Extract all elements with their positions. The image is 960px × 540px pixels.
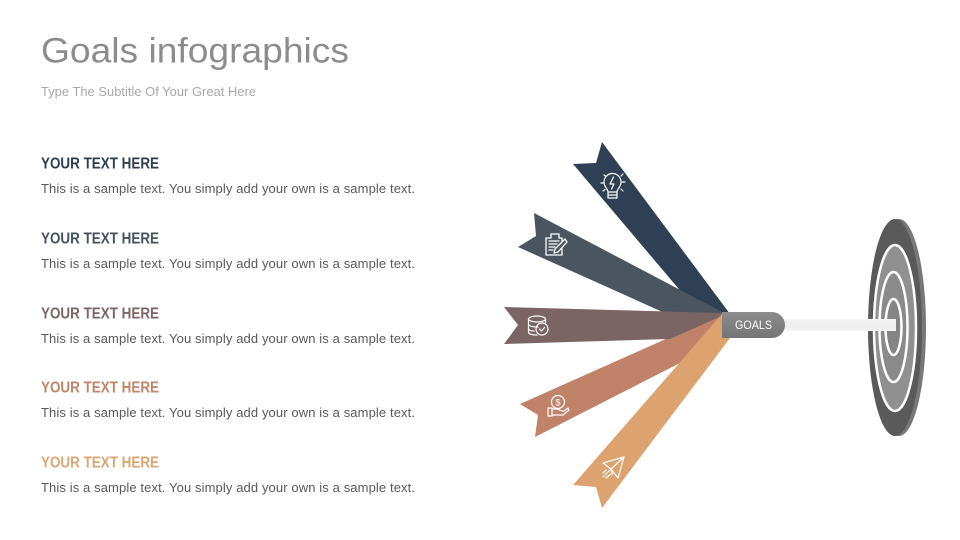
arrow: copper bbox=[520, 313, 724, 437]
goals pill bbox=[722, 312, 785, 338]
goals pill: GOALS bbox=[735, 318, 772, 332]
text block 1: This is a sample text. You simply add your own is a sample text. bbox=[41, 181, 415, 196]
subtitle: Type The Subtitle Of Your Great Here bbox=[41, 84, 256, 99]
target face bbox=[868, 219, 922, 436]
icon: hand with coin bbox=[548, 396, 569, 416]
text block 3 bbox=[41, 306, 415, 346]
ring 2 bbox=[880, 272, 908, 382]
text block 1: YOUR TEXT HERE bbox=[41, 156, 159, 172]
text block 4: This is a sample text. You simply add your own is a sample text. bbox=[41, 405, 415, 420]
icon: document with pen bbox=[546, 234, 567, 255]
text block 3: This is a sample text. You simply add your own is a sample text. bbox=[41, 331, 415, 346]
text block 4 bbox=[41, 380, 415, 420]
arrow: mauve bbox=[504, 307, 724, 344]
text block list bbox=[41, 156, 415, 495]
icon: paper plane bbox=[603, 457, 624, 478]
ring 1 bbox=[874, 245, 916, 411]
target back rim bbox=[872, 219, 926, 436]
ring 3 bbox=[886, 299, 902, 355]
arrow fan bbox=[504, 142, 730, 508]
icon: hand with coin: $ bbox=[555, 398, 561, 408]
arrow shaft bbox=[780, 319, 896, 331]
text block 4: YOUR TEXT HERE bbox=[41, 380, 159, 396]
text block 2 bbox=[41, 230, 415, 271]
text block 5: This is a sample text. You simply add your own is a sample text. bbox=[41, 480, 415, 495]
text block 5 bbox=[41, 454, 415, 495]
icon: database check bbox=[528, 316, 548, 335]
text block 2: This is a sample text. You simply add your own is a sample text. bbox=[41, 256, 415, 271]
text block 5: YOUR TEXT HERE bbox=[41, 454, 159, 472]
arrow: orange bbox=[573, 314, 730, 508]
arrow: slate bbox=[518, 213, 726, 314]
target bbox=[868, 219, 926, 436]
text block 3: YOUR TEXT HERE bbox=[41, 306, 159, 322]
text block 1 bbox=[41, 156, 415, 196]
arrow: navy bbox=[573, 142, 730, 314]
title: Goals infographics bbox=[41, 30, 349, 70]
icon: light bulb bbox=[601, 174, 625, 198]
text block 2: YOUR TEXT HERE bbox=[41, 230, 159, 248]
